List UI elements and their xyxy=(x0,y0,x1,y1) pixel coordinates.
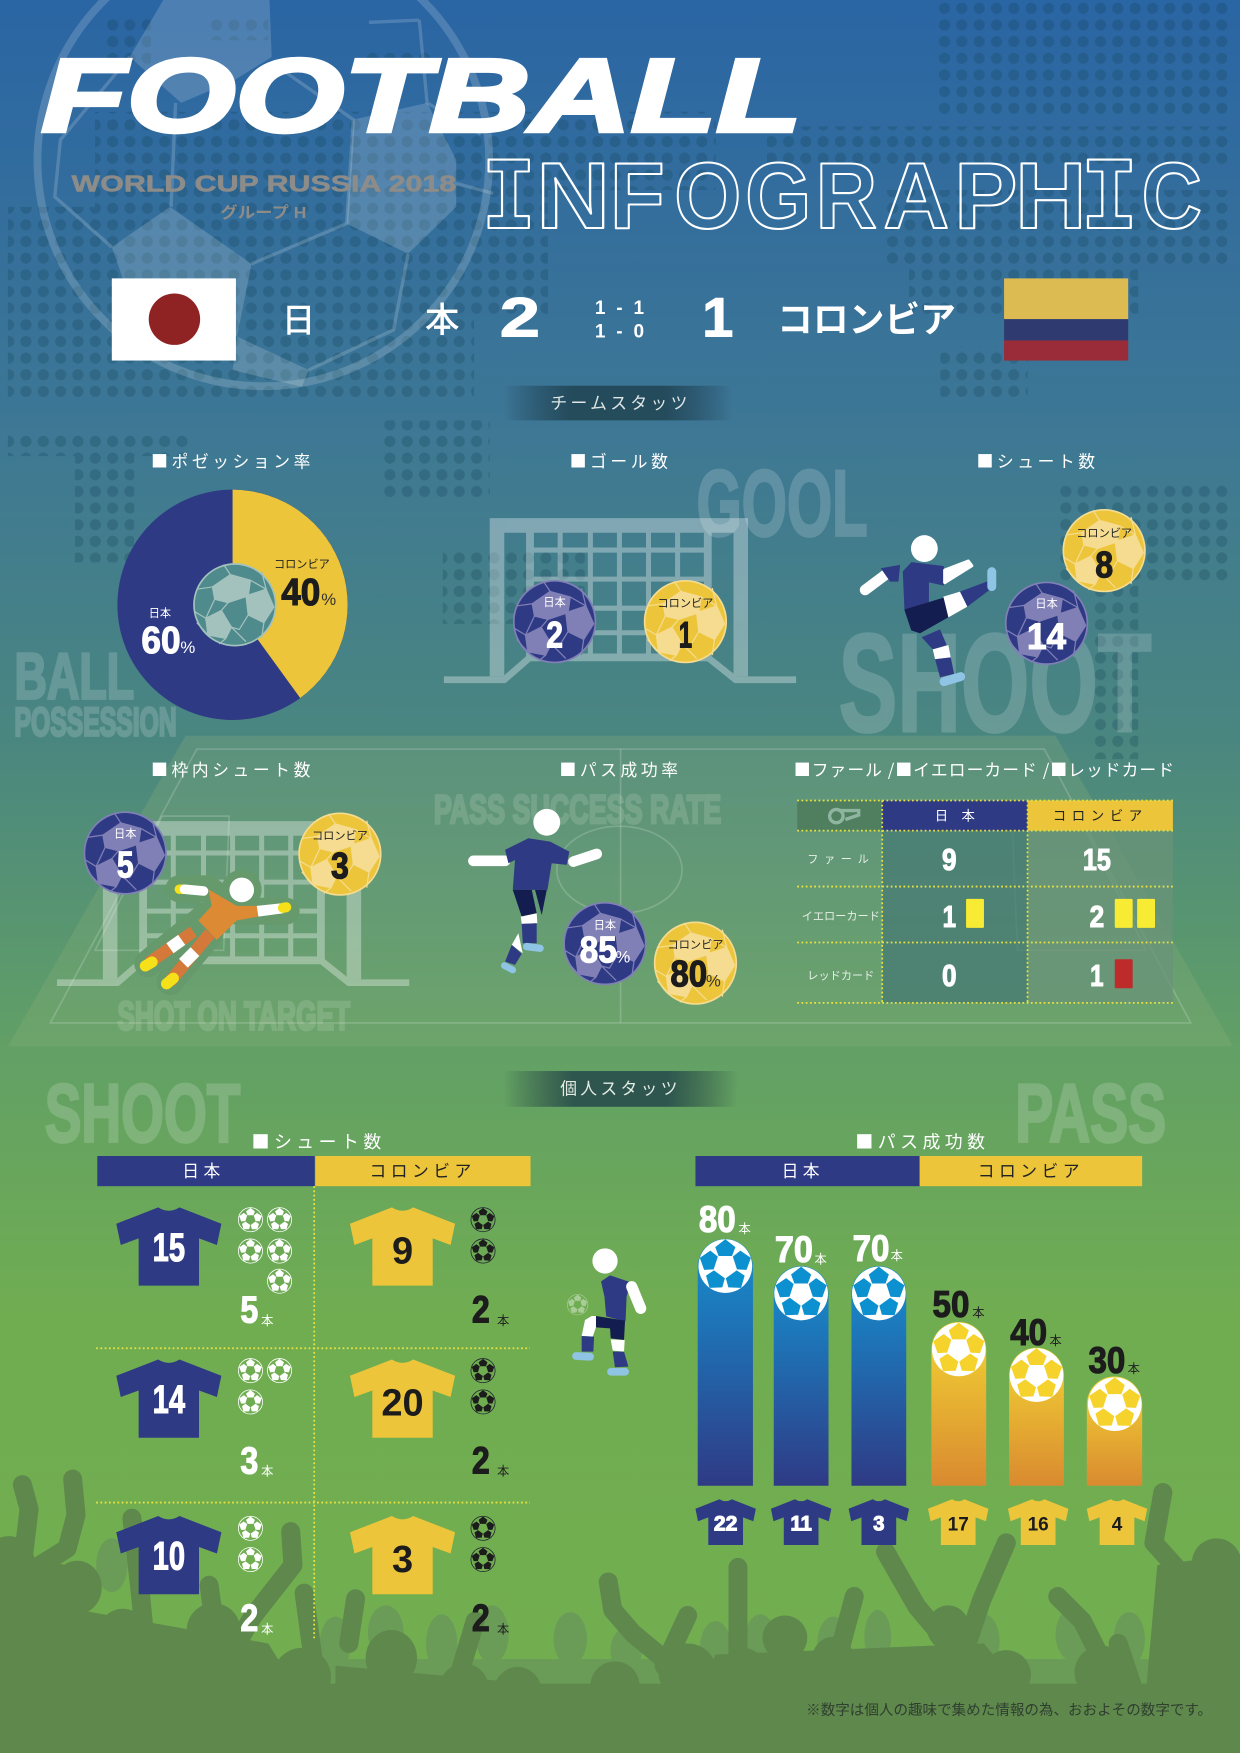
ghost words: SHOOT xyxy=(45,1066,240,1159)
match score: 本 xyxy=(425,302,460,340)
bar: player 4, 30 passes: 30 xyxy=(1088,1340,1125,1381)
ball: Japan pass rate: 85 xyxy=(580,930,617,971)
table: fouls and cards: 2 xyxy=(1090,901,1104,934)
ball: Japan goals: 2 xyxy=(546,614,563,655)
title: INFOGRAPHIC: R xyxy=(816,143,877,248)
pie chart: possession: コロンビア xyxy=(274,558,330,571)
ball: Japan shots xyxy=(1006,582,1087,664)
header: successful passes: コロンビア xyxy=(978,1162,1084,1181)
header: player shots: 日本 xyxy=(182,1162,225,1181)
bar: player 16, 40 passes: 16 xyxy=(1028,1515,1049,1536)
heading: player shots: ■シュート数 xyxy=(252,1128,386,1154)
icon: whistle xyxy=(830,809,859,823)
match score: 1 - 0 xyxy=(595,322,644,343)
ball: Colombia on target xyxy=(299,813,381,895)
row: Colombia 9: 2 xyxy=(472,1290,490,1332)
table: fouls and cards: 9 xyxy=(942,844,957,877)
ball: Colombia shots: 8 xyxy=(1095,544,1113,585)
ball: Colombia pass rate xyxy=(655,922,736,1004)
pie chart: possession: 40 xyxy=(281,572,320,614)
row: Colombia 3: 2 xyxy=(472,1598,490,1640)
event subtitle: グループ H xyxy=(220,203,306,222)
title: INFOGRAPHIC: O xyxy=(674,143,741,248)
pie chart: possession: % xyxy=(180,638,195,657)
ghost words: BALL xyxy=(15,640,134,713)
heading: successful passes: ■パス成功数 xyxy=(855,1128,990,1154)
ball: Colombia goals: 1 xyxy=(679,614,692,655)
row: Japan 15: 本 xyxy=(261,1314,273,1328)
big soccer ball watermark xyxy=(37,0,493,387)
heading: shots on target: ■枠内シュート数 xyxy=(151,757,314,781)
table: fouls and cards: イエローカード xyxy=(802,910,880,923)
bar: player 16, 40 passes: 本 xyxy=(1049,1334,1062,1348)
title: INFOGRAPHIC: N xyxy=(536,143,610,248)
title: INFOGRAPHIC xyxy=(481,142,1202,251)
row: Colombia 3: 本 xyxy=(497,1622,509,1636)
player kicking xyxy=(865,535,992,682)
bar: player 22, 80 passes: 本 xyxy=(739,1222,751,1236)
ball: Colombia goals: コロンビア xyxy=(657,597,713,610)
ball: Colombia shots xyxy=(1063,510,1145,591)
title: INFOGRAPHIC: C xyxy=(1142,143,1202,248)
ball: Japan goals xyxy=(514,581,595,662)
bar: player 16, 40 passes: 40 xyxy=(1010,1312,1047,1353)
bar: player 11, 70 passes: 11 xyxy=(791,1512,812,1536)
ball: Japan pass rate: 日本 xyxy=(594,918,616,932)
pie chart: possession: % xyxy=(321,590,336,609)
ball: Japan on target: 日本 xyxy=(114,826,136,840)
section label: team stats xyxy=(503,386,732,420)
title: INFOGRAPHIC: F xyxy=(610,143,665,248)
player juggling xyxy=(567,1248,641,1372)
bar: player 3, 70 passes: 本 xyxy=(891,1249,903,1263)
bar: player 11, 70 passes: 本 xyxy=(815,1252,827,1266)
title: INFOGRAPHIC: P xyxy=(954,143,1017,248)
bar: player 17, 50 passes: 17 xyxy=(948,1515,969,1536)
row: Colombia 20 xyxy=(350,1359,509,1483)
match score: 日 xyxy=(282,303,315,340)
match score: 2 xyxy=(500,286,540,349)
row: Colombia 20: 20 xyxy=(381,1382,424,1424)
title: INFOGRAPHIC: G xyxy=(745,143,811,248)
ball: Japan shots: 日本 xyxy=(1035,597,1058,611)
event subtitle: WORLD CUP RUSSIA 2018 xyxy=(72,171,456,197)
row: Japan 15: 15 xyxy=(153,1225,185,1270)
table: fouls and cards: 0 xyxy=(942,960,957,993)
bar: player 4, 30 passes xyxy=(1086,1340,1147,1545)
ball: Japan shots: 14 xyxy=(1027,616,1067,657)
row: Japan 10: 本 xyxy=(261,1622,273,1636)
header: player shots xyxy=(97,1156,531,1186)
crowd silhouette xyxy=(0,1479,1240,1753)
ball: Colombia shots: コロンビア xyxy=(1076,527,1132,540)
table: fouls and cards: 日 本 xyxy=(935,809,976,824)
footnote: ※数字は個人の趣味で集めた情報の為、おおよその数字です。 xyxy=(806,1702,1212,1719)
ball: Colombia pass rate: % xyxy=(706,972,721,991)
header: successful passes xyxy=(695,1156,1142,1186)
table: fouls and cards: コロンビア xyxy=(1053,809,1148,824)
table: fouls and cards: ファール xyxy=(807,854,874,866)
flag: Japan xyxy=(112,278,236,361)
ghost words: SHOT ON TARGET xyxy=(117,994,350,1039)
table: fouls and cards: 1 xyxy=(1090,960,1104,993)
ball: Japan on target xyxy=(84,812,166,894)
flag: Colombia xyxy=(1004,278,1128,361)
ghost words: PASS xyxy=(1015,1066,1166,1159)
header: successful passes: 日本 xyxy=(782,1162,824,1181)
pie chart: possession xyxy=(117,490,348,720)
row: Japan 15: 5 xyxy=(240,1290,258,1332)
player passing xyxy=(473,809,597,970)
bar: player 22, 80 passes: 22 xyxy=(714,1512,737,1536)
section label: player stats: 個人スタッツ xyxy=(560,1080,681,1099)
bar: player 16, 40 passes xyxy=(1008,1312,1068,1545)
section label: team stats: チームスタッツ xyxy=(550,394,691,413)
match score xyxy=(282,286,956,349)
row: Japan 10: 2 xyxy=(240,1598,258,1640)
ball: Japan pass rate xyxy=(564,903,646,984)
title: INFOGRAPHIC: I xyxy=(1080,142,1139,251)
heading: shots: ■シュート数 xyxy=(977,448,1099,472)
ball: Japan goals: 日本 xyxy=(543,595,566,609)
row: Colombia 3 xyxy=(350,1516,509,1640)
row: Colombia 9 xyxy=(350,1207,509,1332)
row: Japan 10 xyxy=(116,1516,273,1640)
title: INFOGRAPHIC: I xyxy=(481,142,537,251)
row: Japan 14: 3 xyxy=(240,1441,258,1483)
goal illustration 2 xyxy=(57,828,409,983)
bar: player 22, 80 passes: 80 xyxy=(699,1199,736,1240)
table: fouls and cards: 1 xyxy=(943,901,956,934)
ball: Japan on target: 5 xyxy=(117,845,134,886)
ghost words: GOOL xyxy=(697,451,868,556)
row: Japan 10: 10 xyxy=(153,1534,185,1579)
table: fouls and cards: レッドカード xyxy=(807,969,874,982)
row: Colombia 20: 本 xyxy=(497,1465,509,1479)
goal illustration xyxy=(444,525,796,680)
title: FOOTBALL: FOOTBALL xyxy=(41,38,802,154)
bar: player 4, 30 passes: 4 xyxy=(1112,1515,1123,1536)
pitch xyxy=(8,736,1233,1046)
row: Japan 14 xyxy=(116,1359,292,1483)
event subtitle xyxy=(72,171,456,222)
heading: pass success: ■パス成功率 xyxy=(560,757,682,781)
match score: 1 xyxy=(702,286,733,349)
ball: Colombia on target: コロンビア xyxy=(312,830,368,843)
bar: player 3, 70 passes: 70 xyxy=(853,1228,889,1269)
table: fouls and cards xyxy=(797,800,1173,1003)
section label: player stats xyxy=(503,1071,738,1107)
match score: コロンビア xyxy=(777,300,956,340)
row: Japan 14: 本 xyxy=(261,1465,273,1479)
ghost words xyxy=(15,451,1166,1159)
row: Colombia 3: 3 xyxy=(392,1539,413,1581)
world map dots xyxy=(8,0,1233,759)
bar: player 17, 50 passes: 本 xyxy=(972,1306,984,1320)
bar: player 4, 30 passes: 本 xyxy=(1128,1362,1140,1376)
bar: player 22, 80 passes xyxy=(695,1199,756,1545)
heading: fouls and cards: ■ファール /■イエローカード /■レッドカード xyxy=(794,757,1174,781)
ball: Colombia goals xyxy=(645,581,726,662)
bar: player 17, 50 passes: 50 xyxy=(933,1284,969,1325)
pie chart: possession: 60 xyxy=(141,620,181,662)
bar: player 17, 50 passes xyxy=(928,1284,988,1545)
row: Japan 15 xyxy=(116,1207,292,1332)
heading: goals: ■ゴール数 xyxy=(570,448,671,472)
title: INFOGRAPHIC: A xyxy=(883,143,949,248)
table grid xyxy=(96,1186,530,1639)
bar: player 3, 70 passes xyxy=(849,1228,909,1545)
row: Colombia 9: 9 xyxy=(392,1230,413,1272)
bar: player 3, 70 passes: 3 xyxy=(873,1512,885,1536)
bar: player 11, 70 passes: 70 xyxy=(775,1229,813,1270)
match score: 1 - 1 xyxy=(595,298,644,319)
pie chart: possession: 日本 xyxy=(149,606,171,620)
ghost words: PASS SUCCESS RATE xyxy=(434,787,721,832)
bar: player 11, 70 passes xyxy=(771,1229,831,1545)
ball: Colombia pass rate: 80 xyxy=(670,954,707,995)
ghost words: POSSESSION xyxy=(15,700,177,745)
ball: Colombia on target: 3 xyxy=(331,846,349,887)
row: Colombia 9: 本 xyxy=(497,1314,509,1328)
table: fouls and cards: 15 xyxy=(1083,844,1111,877)
row: Japan 14: 14 xyxy=(153,1377,185,1422)
row: Colombia 20: 2 xyxy=(472,1441,490,1483)
header: player shots: コロンビア xyxy=(370,1162,476,1181)
ball: Japan pass rate: % xyxy=(615,948,630,967)
goalkeeper diving xyxy=(145,878,286,984)
title: INFOGRAPHIC: H xyxy=(1015,143,1087,248)
ball: Colombia pass rate: コロンビア xyxy=(668,939,723,952)
heading: possession: ■ポゼッション率 xyxy=(151,448,314,472)
